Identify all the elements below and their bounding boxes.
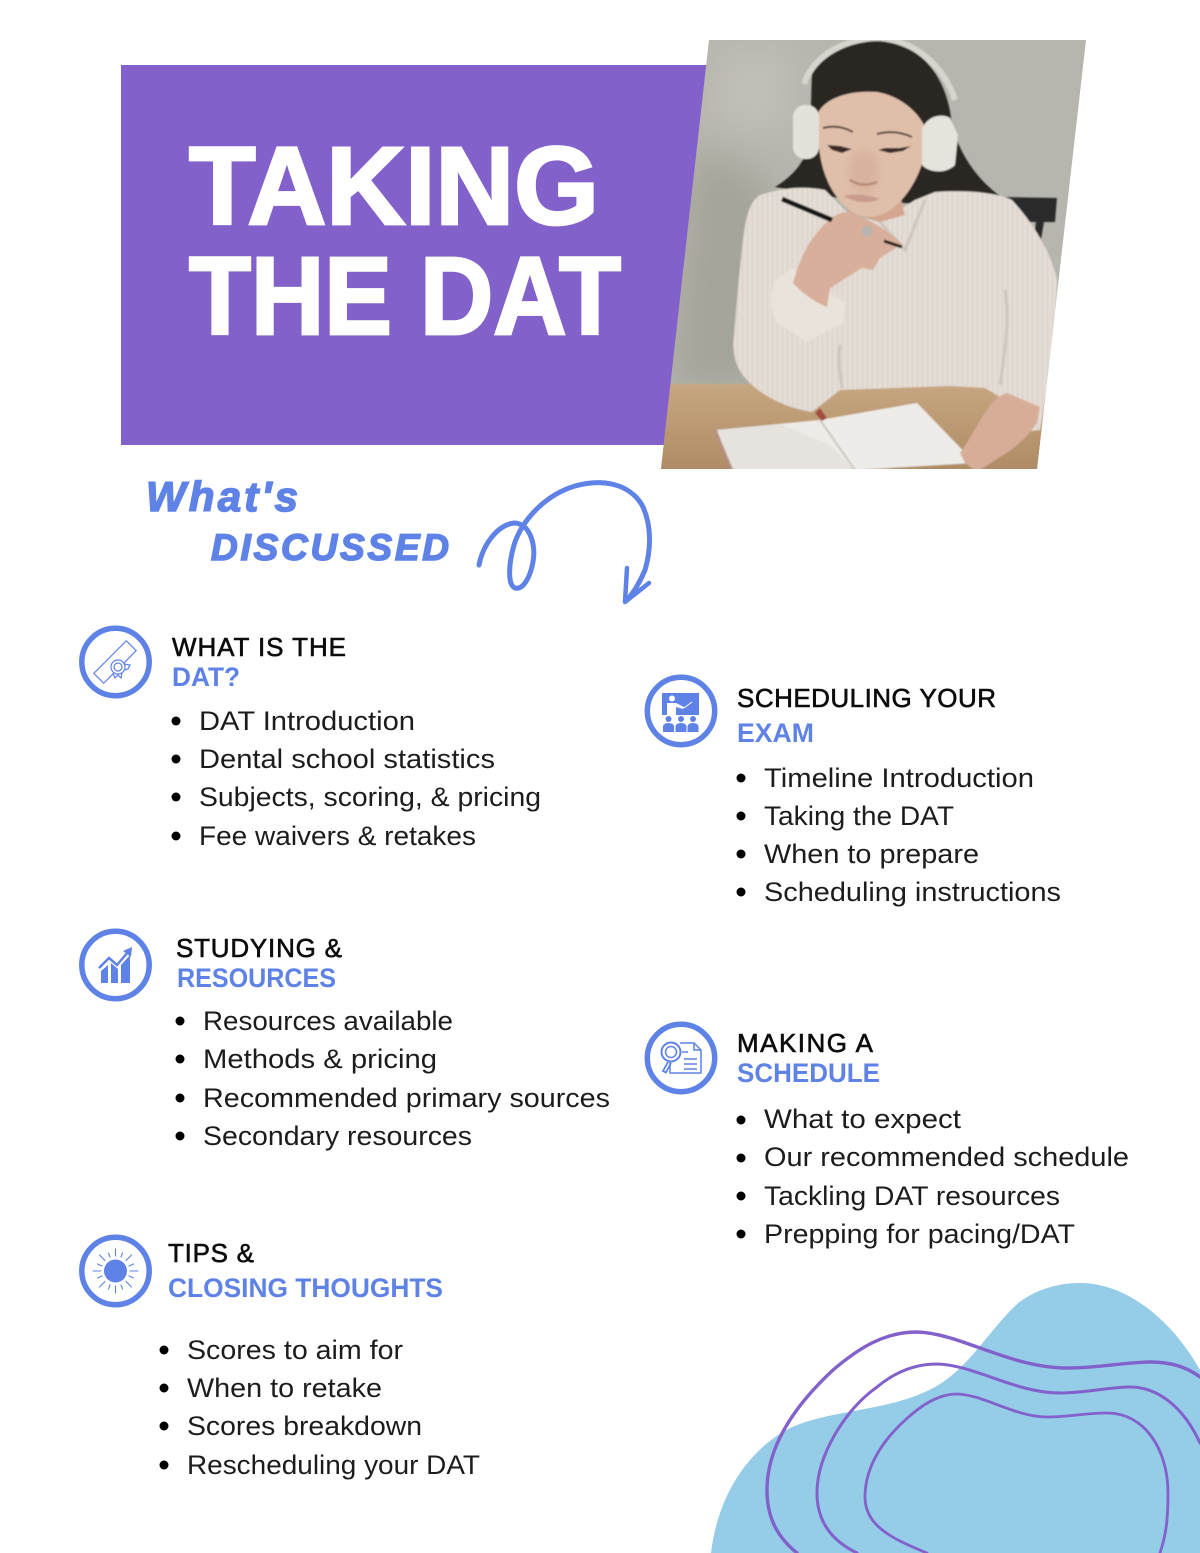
panel: making a schedule — [647, 1024, 1129, 1249]
panel: tips and closing thoughts — [82, 1237, 480, 1480]
bullet list: Our recommended schedule — [764, 1142, 1129, 1172]
panel: studying and resources — [82, 931, 610, 1151]
icon: presenter at board — [647, 677, 715, 745]
section title: What's discussed — [146, 473, 449, 568]
bullet list — [160, 1335, 480, 1480]
cuff — [771, 268, 845, 342]
heading: EXAM — [737, 718, 814, 748]
pen — [782, 199, 832, 220]
panel: what is the DAT — [82, 628, 541, 851]
nose — [850, 180, 877, 185]
eyes and brows — [827, 145, 911, 153]
bullet list: Rescheduling your DAT — [187, 1450, 480, 1480]
lips — [843, 195, 880, 202]
title: TAKING — [189, 125, 599, 248]
heading — [737, 1028, 880, 1088]
title — [189, 125, 621, 358]
bullet list: Dental school statistics — [199, 744, 495, 774]
heading: RESOURCES — [177, 963, 336, 993]
title banner — [121, 65, 708, 445]
title: THE DAT — [189, 235, 621, 358]
chair — [1005, 196, 1058, 240]
heading — [168, 1238, 443, 1303]
icon: sun — [82, 1237, 149, 1305]
bullet list: Secondary resources — [203, 1121, 472, 1151]
bullet list: DAT Introduction — [199, 706, 415, 736]
notebook — [717, 403, 975, 470]
bullet list: Tackling DAT resources — [764, 1181, 1060, 1211]
face — [818, 92, 927, 217]
heading: CLOSING THOUGHTS — [168, 1273, 443, 1303]
bullet list — [172, 706, 541, 851]
bullet list — [176, 1006, 610, 1151]
photo: student with headphones — [655, 35, 1095, 475]
bullet list: Prepping for pacing/DAT — [764, 1219, 1075, 1249]
bullet list: Fee waivers & retakes — [199, 821, 476, 851]
heading — [172, 632, 346, 692]
bullet list: What to expect — [764, 1104, 962, 1134]
bullet list: Taking the DAT — [764, 801, 954, 831]
sweater folds — [839, 200, 1007, 388]
blob background — [711, 1283, 1200, 1553]
table — [655, 384, 1095, 474]
heading: MAKING A — [737, 1028, 874, 1058]
right hand — [960, 393, 1040, 472]
heading: SCHEDULE — [737, 1058, 880, 1088]
bullet list: Subjects, scoring, & pricing — [199, 782, 541, 812]
icon: magnifier over document — [647, 1024, 715, 1092]
bullet list: Scores to aim for — [187, 1335, 403, 1365]
arrow: curly arrow — [479, 483, 650, 602]
contour lines — [767, 1332, 1200, 1553]
bullet list: Scores breakdown — [187, 1411, 422, 1441]
bullet list — [736, 763, 1061, 907]
heading — [176, 933, 342, 993]
icon: growth chart — [82, 931, 149, 999]
headband — [804, 38, 955, 100]
bullet list: When to retake — [187, 1373, 382, 1403]
bullet list — [736, 1104, 1129, 1249]
heading: TIPS & — [168, 1238, 254, 1268]
bullet list: Scheduling instructions — [764, 877, 1061, 907]
section title: What's discussed: DISCUSSED — [211, 527, 449, 568]
bullet list: Recommended primary sources — [203, 1083, 610, 1113]
bullet list: Methods & pricing — [203, 1044, 437, 1074]
panel: scheduling your exam — [647, 677, 1061, 907]
heading — [737, 683, 996, 748]
bullet list: When to prepare — [764, 839, 979, 869]
bullet list: Timeline Introduction — [764, 763, 1034, 793]
sweater — [733, 188, 1057, 432]
neck — [848, 200, 906, 222]
heading: DAT? — [172, 662, 240, 692]
section title: What's discussed: What's — [146, 473, 298, 520]
icon: diploma — [82, 628, 149, 696]
heading: STUDYING & — [176, 933, 342, 963]
heading: WHAT IS THE — [172, 632, 346, 662]
bullet list: Resources available — [203, 1006, 453, 1036]
hair — [775, 40, 1000, 205]
heading: SCHEDULING YOUR — [737, 683, 996, 713]
earcups — [793, 105, 819, 159]
hand at chin — [793, 212, 902, 307]
